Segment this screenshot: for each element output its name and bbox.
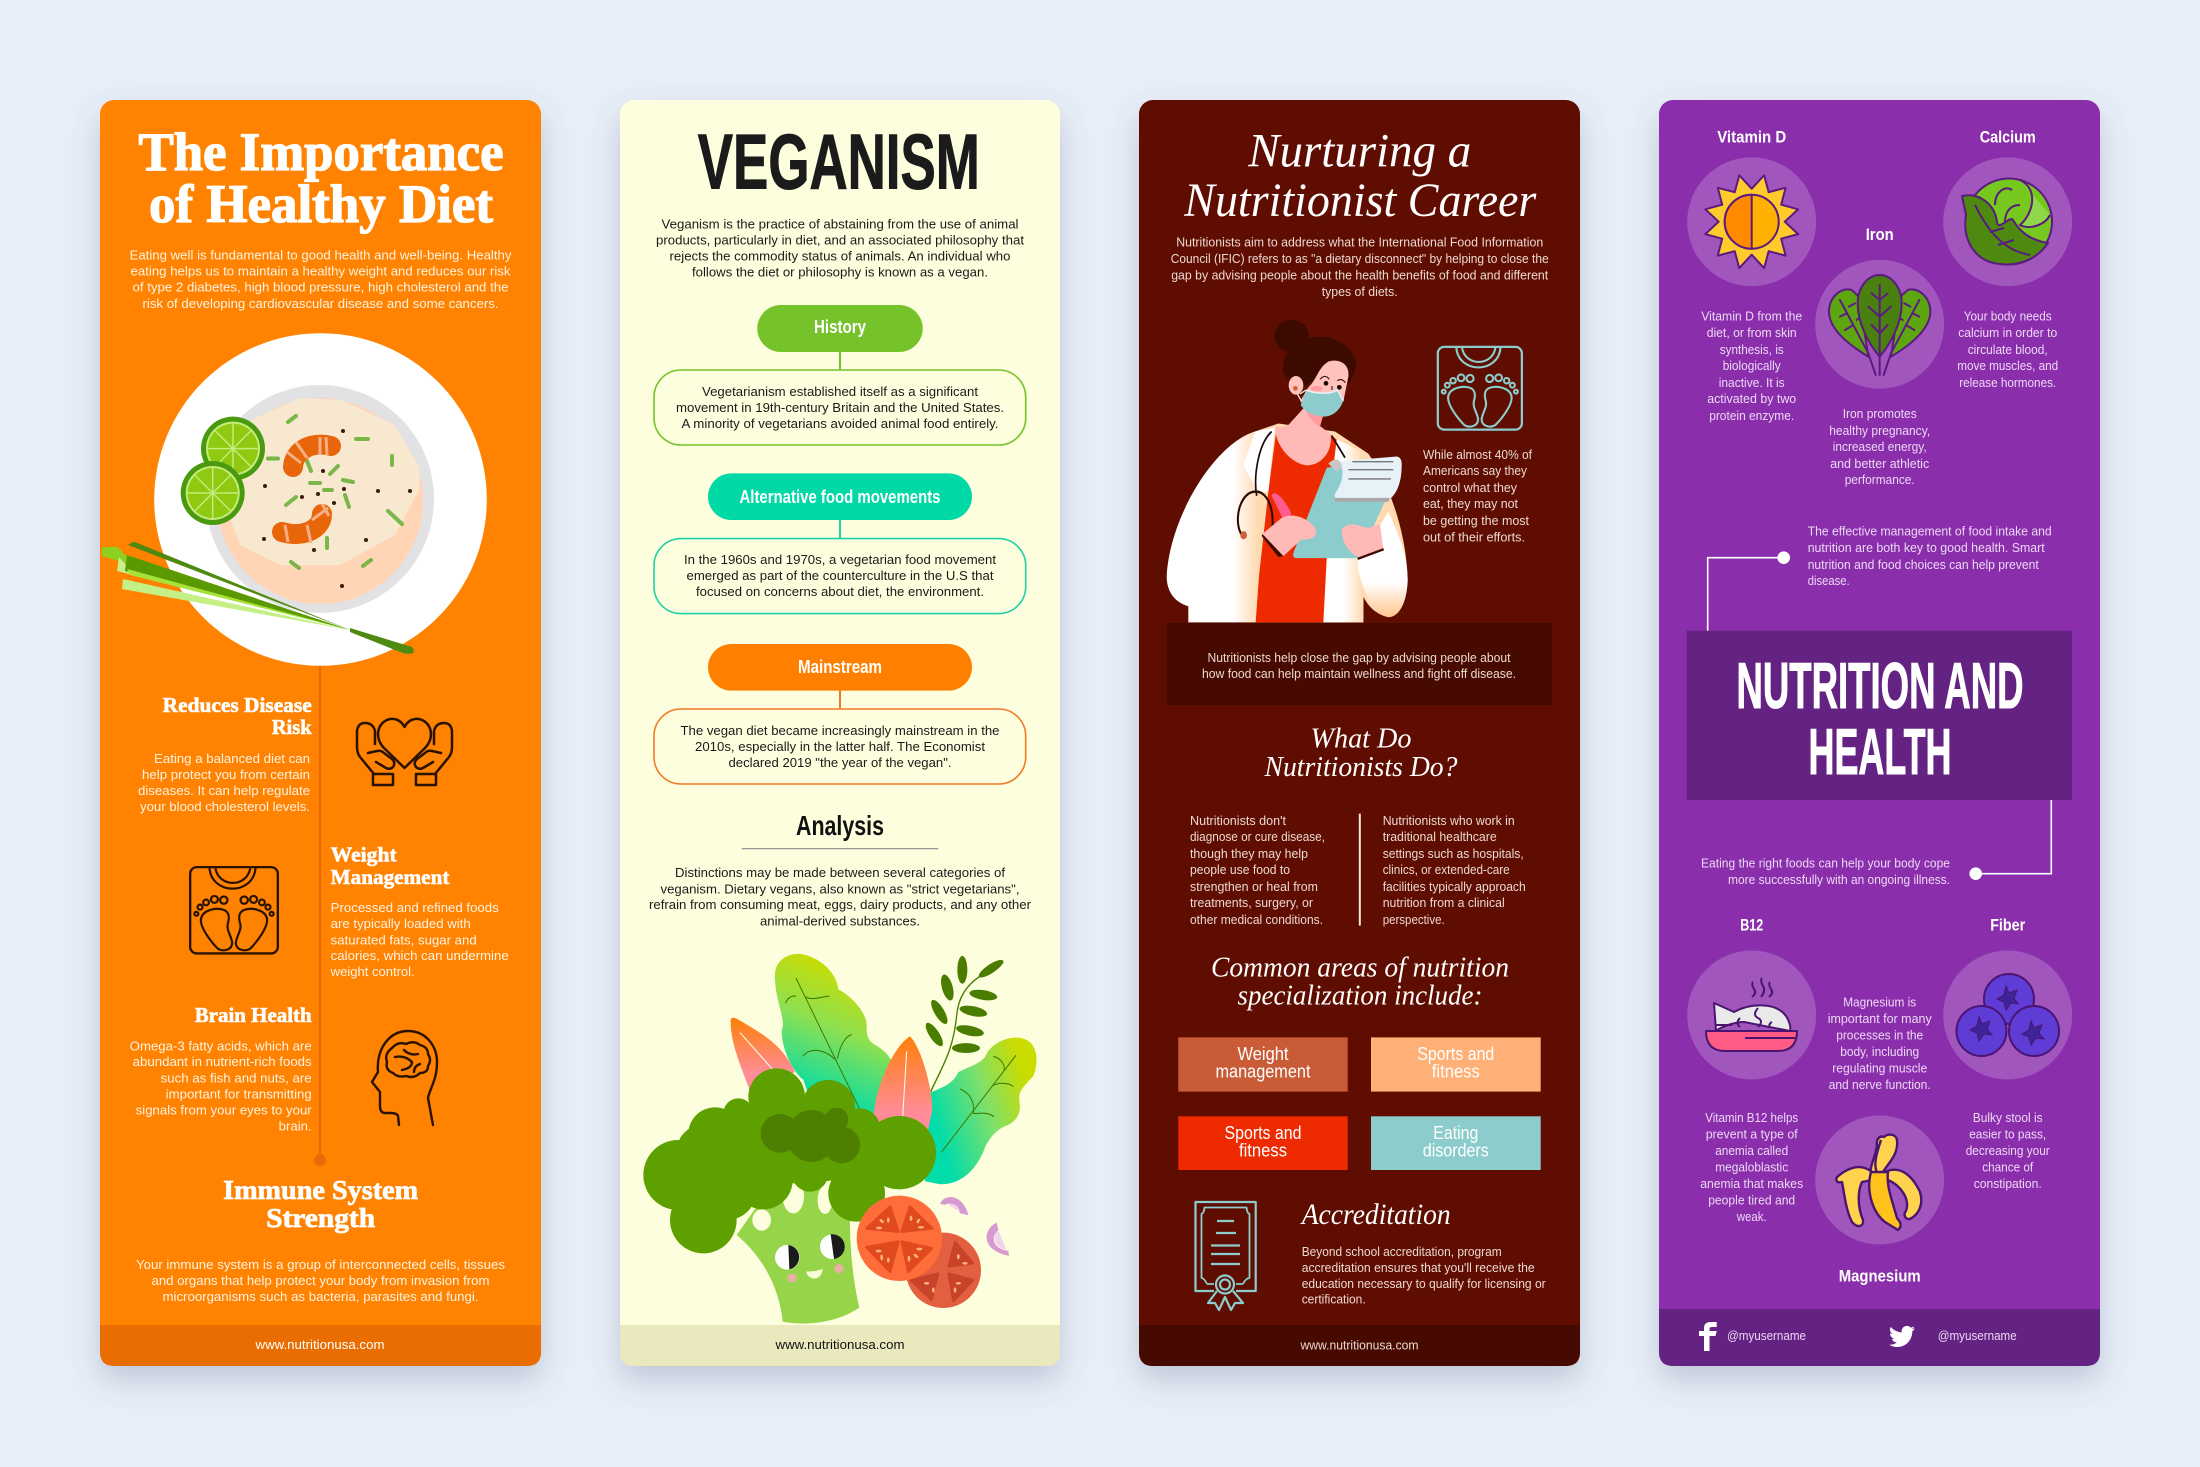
calcium text: circulate blood, <box>1968 342 2048 357</box>
heading: analysis: Analysis <box>796 810 884 841</box>
block: reduces disease risk: Eating a balanced diet can <box>154 751 310 766</box>
tag: weight management: management <box>1216 1062 1310 1082</box>
title: nutrition and health: HEALTH <box>1808 715 1952 788</box>
heading: common areas <box>1211 952 1509 1011</box>
intro text <box>130 248 512 311</box>
right column text: perspective. <box>1383 912 1445 927</box>
nutrient: iron: increased energy, <box>1833 439 1927 454</box>
nutrient: magnesium: important for many <box>1828 1011 1932 1026</box>
right column text: Nutritionists who work in <box>1383 813 1515 828</box>
left column text: diagnose or cure disease, <box>1190 829 1325 844</box>
block: weight management: weight control. <box>330 964 415 979</box>
caption beside doctor: Americans say they <box>1423 463 1527 478</box>
illustration: broccoli and vegetables <box>643 954 1037 1324</box>
title: nutrition and health <box>1687 631 2072 800</box>
calcium text: move muscles, and <box>1957 358 2058 373</box>
accreditation block: Beyond school accreditation, program <box>1302 1244 1502 1259</box>
block: reduces disease risk: help protect you from certain <box>142 767 310 782</box>
nutrient: B12: weak. <box>1736 1209 1767 1224</box>
section: alternative food movements: emerged as part of the counterculture in the U.S that <box>686 568 994 583</box>
block: brain health: signals from your eyes to your <box>136 1103 312 1118</box>
tag: eating disorders: disorders <box>1423 1141 1489 1161</box>
block: brain health: abundant in nutrient-rich foods <box>133 1054 312 1069</box>
connector top <box>1708 551 1790 631</box>
caption beside doctor: control what they <box>1423 480 1517 495</box>
nutrient: iron: Iron <box>1866 225 1894 244</box>
callout: close the gap: Nutritionists help close the gap by advising people about <box>1208 650 1511 665</box>
effective management text <box>1808 524 2052 588</box>
nutrient: vitamin D: diet, or from skin <box>1707 325 1797 340</box>
caption beside doctor: While almost 40% of <box>1423 447 1532 462</box>
illustration: plate of soup <box>102 333 487 666</box>
tag: eating disorders: Eating <box>1433 1123 1478 1143</box>
footer: website <box>100 1325 541 1366</box>
footer: website: www.nutritionusa.com <box>774 1337 904 1352</box>
left column text: Nutritionists don't <box>1190 813 1286 828</box>
left column text: people use food to <box>1190 862 1290 877</box>
right column text: facilities typically approach <box>1383 879 1526 894</box>
left column text: though they may help <box>1190 846 1308 861</box>
block: weight management: Processed and refined foods <box>331 900 499 915</box>
section: history: movement in 19th-century Britain and the United States. <box>676 400 1004 415</box>
section: alternative food movements: Alternative food movements <box>740 487 940 507</box>
block: reduces disease risk: Reduces Disease <box>163 693 312 717</box>
block: weight management: are typically loaded with <box>331 916 471 931</box>
panel 4 background <box>1659 100 2100 1366</box>
caption beside doctor: out of their efforts. <box>1423 530 1525 545</box>
panel: nutrition and health <box>1659 100 2100 1366</box>
block: immune system strength <box>136 1175 506 1304</box>
nutrient: B12: B12 <box>1740 916 1763 935</box>
accreditation block: education necessary to qualify for licensing or <box>1302 1276 1546 1291</box>
section: history: History <box>814 317 866 337</box>
footer: website <box>620 1325 1060 1366</box>
nutrient: B12: people tired and <box>1708 1193 1795 1208</box>
nutrient: magnesium: regulating muscle <box>1832 1061 1927 1076</box>
calcium text: Your body needs <box>1964 309 2052 324</box>
right column text: settings such as hospitals, <box>1383 846 1524 861</box>
block: immune system strength: and organs that help protect your body from invasion from <box>152 1273 490 1288</box>
section: mainstream: Mainstream <box>798 657 882 677</box>
heading: common areas: specialization include: <box>1238 979 1482 1011</box>
callout: close the gap: how food can help maintain wellness and fight off disease. <box>1202 666 1516 681</box>
ongoing illness text <box>1701 856 1950 887</box>
section: mainstream: The vegan diet became increasingly mainstream in the <box>680 723 1000 738</box>
nutrient: B12: prevent a type of <box>1706 1127 1798 1142</box>
block: weight management: saturated fats, sugar and <box>331 932 477 948</box>
block: brain health: Brain Health <box>195 1003 312 1027</box>
nutrient: magnesium: body, including <box>1840 1044 1919 1059</box>
intro text: risk of developing cardiovascular disease and some cancers. <box>142 296 498 311</box>
accreditation block: accreditation ensures that you'll receive the <box>1302 1260 1535 1275</box>
title: The Importance of Healthy Diet: The Importance <box>138 122 504 182</box>
ongoing illness text: more successfully with an ongoing illness. <box>1728 872 1950 887</box>
nutrient: fiber <box>1943 916 2072 1191</box>
block: brain health: Omega-3 fatty acids, which are <box>130 1038 312 1053</box>
block: reduces disease risk: Risk <box>272 715 312 739</box>
section: alternative food movements: In the 1960s and 1970s, a vegetarian food movement <box>684 552 996 567</box>
title: VEGANISM: VEGANISM <box>698 118 980 206</box>
calcium text: calcium in order to <box>1958 325 2057 340</box>
nutrient: iron: Iron promotes <box>1843 406 1917 421</box>
block: brain health: important for transmitting <box>166 1086 312 1101</box>
analysis text: refrain from consuming meat, eggs, dairy products, and any other <box>649 897 1032 912</box>
right column text: clinics, or extended-care <box>1383 862 1510 877</box>
nutrient: B12 <box>1687 916 1816 1224</box>
panel: veganism <box>620 100 1060 1366</box>
block: weight management: Weight <box>331 843 397 867</box>
heading: what do nutritionists do <box>1264 723 1458 783</box>
intro text: types of diets. <box>1322 284 1398 299</box>
block: brain health: brain. <box>279 1119 312 1134</box>
title: Nurturing a Nutritionist Career: Nutritionist Career <box>1183 174 1537 227</box>
nutrient: fiber: chance of <box>1982 1160 2034 1175</box>
section: mainstream: 2010s, especially in the latter half. The Economist <box>695 739 985 754</box>
left column text: treatments, surgery, or <box>1190 895 1314 910</box>
nutrient: magnesium: Magnesium <box>1839 1267 1921 1286</box>
calcium text <box>1957 309 2058 390</box>
nutrient: B12: Vitamin B12 helps <box>1705 1110 1799 1125</box>
panel 3 background <box>1139 100 1580 1366</box>
tag: sports and fitness (peach): Sports and <box>1417 1044 1494 1064</box>
left column text: strengthen or heal from <box>1190 879 1318 894</box>
icon: hands holding heart <box>357 719 452 785</box>
panel 1 background <box>100 100 541 1366</box>
effective management text: nutrition are both key to good health. Smart <box>1808 540 2045 555</box>
nutrient: magnesium: and nerve function. <box>1829 1077 1931 1092</box>
block: immune system strength: Immune System <box>223 1175 419 1205</box>
footer: social handles: @myusername <box>1938 1329 2017 1343</box>
effective management text: nutrition and food choices can help prevent <box>1808 557 2039 572</box>
tag: sports and fitness (red): Sports and <box>1224 1123 1302 1143</box>
panel 2 background <box>620 100 1060 1366</box>
block: immune system strength: microorganisms such as bacteria, parasites and fungi. <box>162 1289 478 1304</box>
block: brain health: such as fish and nuts, are <box>161 1071 312 1086</box>
icon: bathroom scale <box>1438 347 1522 430</box>
nutrient: vitamin D <box>1687 128 1816 423</box>
caption beside doctor: eat, they may not <box>1423 496 1518 511</box>
right column text <box>1383 813 1526 927</box>
block: reduces disease risk <box>138 693 312 814</box>
illustration: nutritionist with clipboard <box>1167 320 1408 622</box>
footer: website: www.nutritionusa.com <box>254 1337 384 1352</box>
title: The Importance of Healthy Diet: of Healthy Diet <box>149 174 493 234</box>
intro text: Veganism is the practice of abstaining from the use of animal <box>662 217 1019 232</box>
title: Nurturing a Nutritionist Career <box>1183 124 1537 227</box>
nutrient: B12: anemia that makes <box>1700 1176 1804 1191</box>
nutrient: B12: anemia called <box>1715 1143 1788 1158</box>
nutrient: B12: megaloblastic <box>1715 1160 1789 1175</box>
block: immune system strength: Strength <box>266 1203 375 1233</box>
nutrient: fiber: decreasing your <box>1966 1143 2050 1158</box>
nutrient: vitamin D: biologically <box>1723 358 1781 373</box>
nutrient: magnesium: processes in the <box>1836 1028 1923 1043</box>
section: history: Vegetarianism established itself as a significant <box>702 384 978 399</box>
title: The Importance of Healthy Diet <box>138 122 504 234</box>
nutrient: iron: healthy pregnancy, <box>1829 423 1930 438</box>
footer: social handles <box>1659 1309 2100 1366</box>
section: alternative food movements <box>654 473 1026 614</box>
tag: sports and fitness (red) <box>1178 1116 1348 1170</box>
tag: sports and fitness (peach) <box>1371 1037 1541 1092</box>
nutrient: fiber: Fiber <box>1990 916 2026 935</box>
block: reduces disease risk: diseases. It can help regulate <box>138 783 310 798</box>
section: alternative food movements: focused on concerns about diet, the environment. <box>696 584 984 599</box>
callout: close the gap <box>1167 623 1552 705</box>
ongoing illness text: Eating the right foods can help your body cope <box>1701 856 1950 871</box>
section: history <box>654 305 1026 445</box>
block: brain health <box>130 1003 312 1134</box>
intro text: Council (IFIC) refers to as "a dietary disconnect" by helping to close the <box>1171 251 1549 266</box>
left column text: other medical conditions. <box>1190 912 1323 927</box>
title: Nurturing a Nutritionist Career: Nurturing a <box>1247 124 1471 177</box>
nutrient: vitamin D: inactive. It is <box>1719 375 1785 390</box>
block: weight management <box>330 843 509 979</box>
analysis text <box>649 865 1032 928</box>
nutrient: vitamin D: Vitamin D <box>1717 128 1786 147</box>
nutrient: magnesium <box>1815 995 1944 1286</box>
connector bottom <box>1969 800 2051 880</box>
calcium text: release hormones. <box>1959 375 2056 390</box>
nutrient: vitamin D: synthesis, is <box>1720 342 1784 357</box>
tag: sports and fitness (red): fitness <box>1239 1141 1287 1161</box>
accreditation block: certification. <box>1302 1292 1366 1307</box>
analysis text: animal-derived substances. <box>760 913 920 928</box>
intro text: eating helps us to maintain a healthy weight and reduces our risk <box>130 264 511 279</box>
nutrient: vitamin D: Vitamin D from the <box>1701 309 1802 324</box>
icon: head with brain <box>372 1031 437 1125</box>
block: weight management: Management <box>331 865 449 889</box>
panel: nutritionist career <box>1139 100 1580 1366</box>
nutrient: fiber: easier to pass, <box>1969 1127 2046 1142</box>
right column text: traditional healthcare <box>1383 829 1497 844</box>
section: mainstream <box>654 644 1026 784</box>
intro text: follows the diet or philosophy is known as a vegan. <box>692 264 988 279</box>
nutrient: vitamin D: protein enzyme. <box>1709 408 1794 423</box>
right column text: nutrition from a clinical <box>1383 895 1505 910</box>
nutrient: fiber: constipation. <box>1974 1176 2042 1191</box>
nutrient: vitamin D: activated by two <box>1707 391 1796 406</box>
nutrient: iron: and better athletic <box>1830 456 1930 471</box>
footer: website <box>1139 1325 1580 1366</box>
tag: eating disorders <box>1371 1116 1541 1170</box>
block: reduces disease risk: your blood cholesterol levels. <box>140 799 310 814</box>
heading: what do nutritionists do: What Do <box>1310 723 1412 755</box>
heading: common areas: Common areas of nutrition <box>1211 952 1509 984</box>
nutrient: magnesium: Magnesium is <box>1843 995 1917 1010</box>
footer: website: www.nutritionusa.com <box>1300 1338 1418 1353</box>
nutrient: iron <box>1815 225 1944 487</box>
accreditation block <box>1300 1198 1546 1307</box>
nutrient: fiber: Bulky stool is <box>1973 1110 2043 1125</box>
icon: certificate <box>1196 1202 1256 1310</box>
accreditation block: Accreditation <box>1300 1198 1451 1231</box>
effective management text: disease. <box>1808 573 1850 588</box>
section: mainstream: declared 2019 "the year of the vegan". <box>728 755 952 770</box>
block: immune system strength: Your immune system is a group of interconnected cells, tissues <box>136 1257 506 1272</box>
caption beside doctor <box>1423 447 1532 545</box>
analysis text: Distinctions may be made between several categories of <box>675 865 1005 880</box>
intro text: gap by advising people about the health benefits of food and different <box>1171 268 1549 283</box>
intro text: products, particularly in diet, and an associated philosophy that <box>656 233 1024 248</box>
analysis text: veganism. Dietary vegans, also known as "strict vegetarians", <box>660 882 1020 896</box>
heading: what do nutritionists do: Nutritionists Do? <box>1264 751 1458 783</box>
intro text: Eating well is fundamental to good health and well-being. Healthy <box>130 248 512 262</box>
left column text <box>1190 813 1325 927</box>
panel: healthy diet <box>100 100 541 1366</box>
section: history: A minority of vegetarians avoided animal food entirely. <box>682 416 998 431</box>
effective management text: The effective management of food intake and <box>1808 524 2052 539</box>
icon: bathroom scale <box>190 867 278 953</box>
tag: sports and fitness (peach): fitness <box>1432 1062 1480 1082</box>
tag: weight management <box>1178 1037 1348 1092</box>
tag: weight management: Weight <box>1238 1044 1288 1064</box>
block: weight management: calories, which can undermine <box>331 948 509 963</box>
nutrient: iron: performance. <box>1845 472 1915 487</box>
caption beside doctor: be getting the most <box>1423 513 1529 528</box>
intro text: Nutritionists aim to address what the International Food Information <box>1176 235 1543 250</box>
nutrient: calcium: Calcium <box>1980 128 2036 147</box>
timeline line <box>314 660 326 1166</box>
intro text <box>1171 235 1549 299</box>
nutrient: calcium <box>1943 128 2072 286</box>
intro text <box>656 217 1024 279</box>
intro text: rejects the commodity status of animals. An individual who <box>670 248 1010 263</box>
footer: social handles: @myusername <box>1727 1329 1806 1343</box>
intro text: of type 2 diabetes, high blood pressure, high cholesterol and the <box>132 280 508 295</box>
